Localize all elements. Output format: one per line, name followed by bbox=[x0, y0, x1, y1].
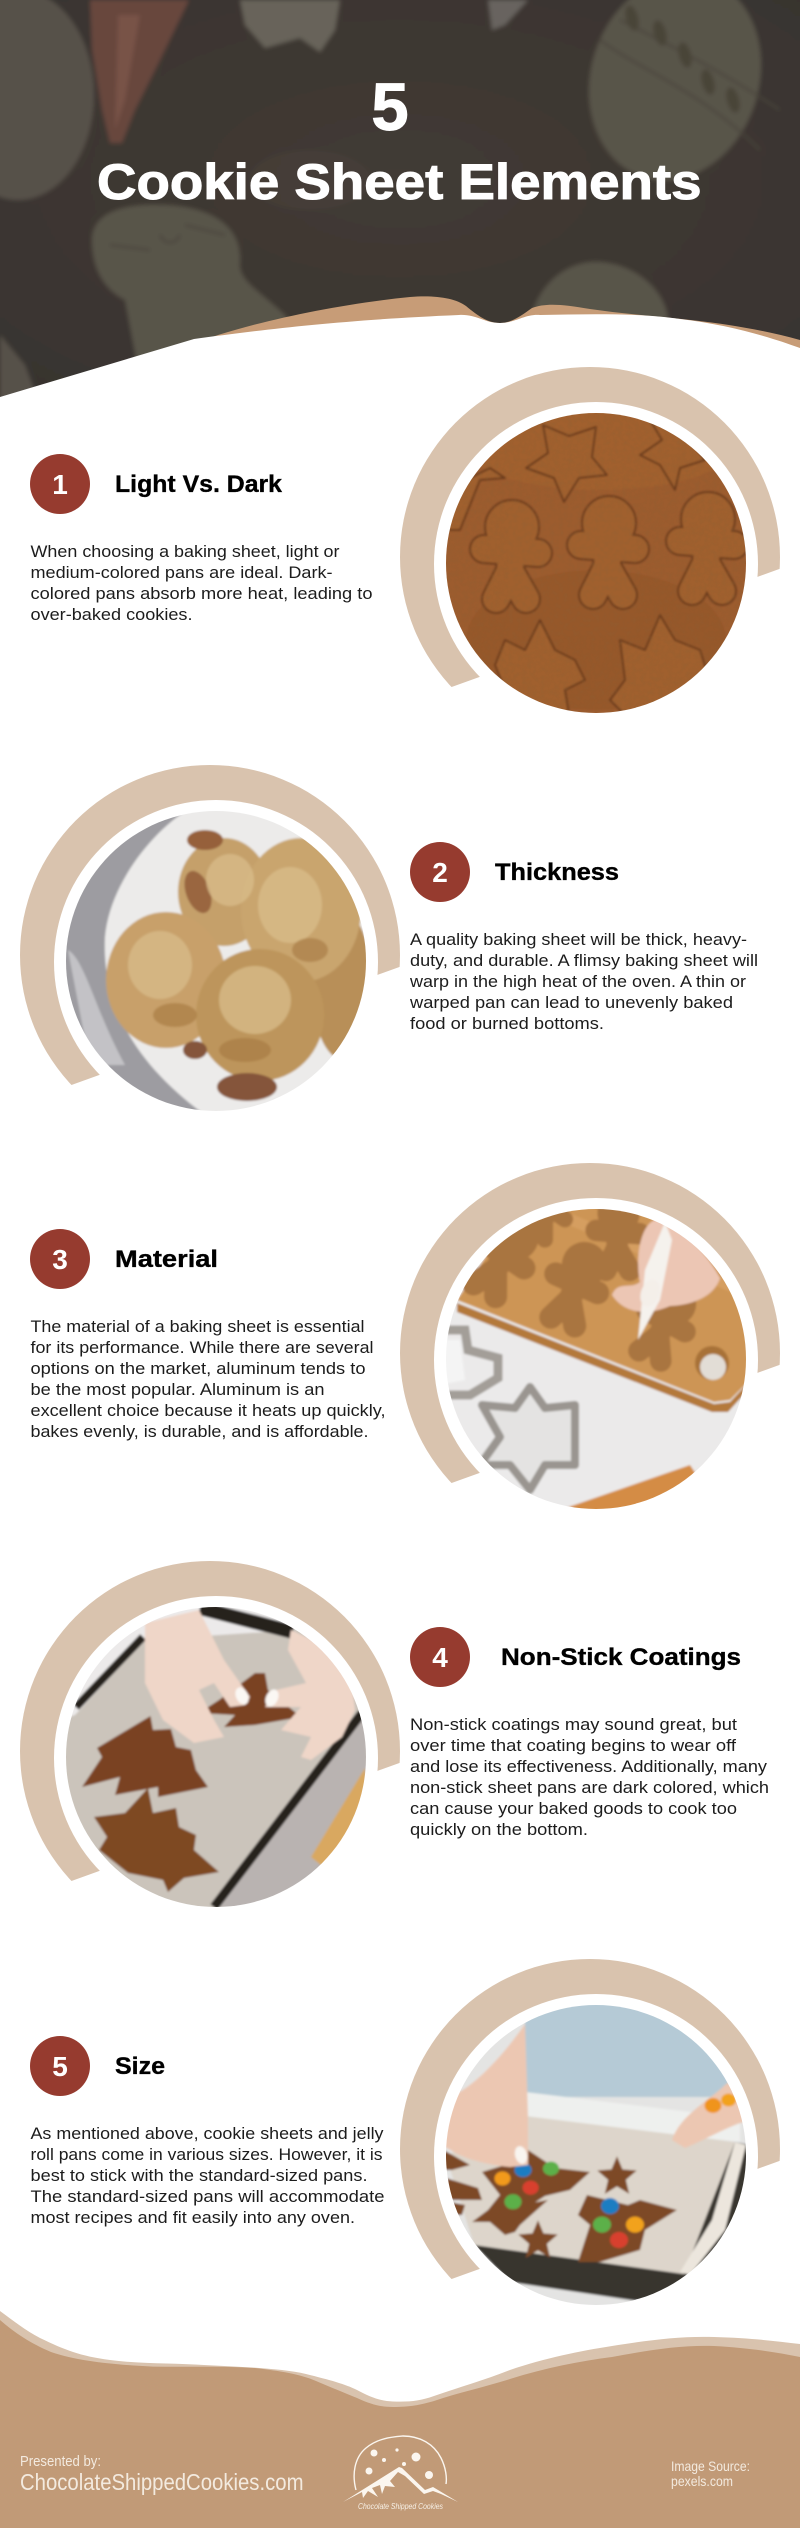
badge 4 bbox=[410, 1627, 470, 1687]
badge 1: 1 bbox=[52, 469, 68, 500]
image source: pexels.com bbox=[671, 2473, 733, 2489]
text 1: When choosing a baking sheet, light or bbox=[30, 542, 340, 561]
text 3 bbox=[30, 1317, 386, 1441]
logo bbox=[343, 2436, 458, 2511]
text 5: roll pans come in various sizes. However, it is bbox=[30, 2145, 382, 2164]
text 3: for its performance. While there are several bbox=[30, 1338, 374, 1357]
arch 1 bbox=[400, 367, 780, 747]
photo: rolled gingerbread dough bbox=[440, 405, 752, 720]
title: Cookie Sheet Elements bbox=[97, 154, 702, 210]
title: 5 bbox=[371, 70, 409, 145]
text 5: most recipes and fit easily into any oven. bbox=[30, 2208, 355, 2227]
text 4: non-stick sheet pans are dark colored, which bbox=[410, 1778, 769, 1797]
photo: hands and tree cookies on pan bbox=[60, 1600, 372, 1915]
image source: Image Source: bbox=[671, 2458, 750, 2474]
arch 3 bbox=[400, 1163, 780, 1543]
photo: icing gingerbread on board bbox=[446, 1209, 746, 1509]
text 2: duty, and durable. A flimsy baking sheet will bbox=[410, 951, 758, 970]
badge 5: 5 bbox=[52, 2051, 68, 2082]
text 4: over time that coating begins to wear off bbox=[410, 1736, 736, 1755]
arch 5 bbox=[400, 1959, 780, 2339]
text 4: can cause your baked goods to cook too bbox=[410, 1799, 737, 1818]
badge 2: 2 bbox=[432, 857, 448, 888]
text 4: quickly on the bottom. bbox=[410, 1820, 588, 1839]
badge 3: 3 bbox=[52, 1244, 68, 1275]
text 3: The material of a baking sheet is essential bbox=[30, 1317, 364, 1336]
heading 5: Size bbox=[115, 2053, 165, 2080]
text 5: best to stick with the standard-sized pans. bbox=[30, 2166, 368, 2185]
text 2: warped pan can lead to unevenly baked bbox=[409, 993, 733, 1012]
panel: 2 thickness bbox=[20, 765, 758, 1145]
header background photo bbox=[0, 0, 800, 410]
text 3: excellent choice because it heats up quickly, bbox=[30, 1401, 386, 1420]
text 2: warp in the high heat of the oven. A thin or bbox=[409, 972, 746, 991]
heading 3: Material bbox=[115, 1246, 218, 1273]
badge 1 bbox=[30, 454, 90, 514]
presented by bbox=[20, 2454, 304, 2495]
heading 1: Light Vs. Dark bbox=[115, 471, 283, 498]
header accent wave bbox=[214, 296, 800, 348]
text 3: be the most popular. Aluminum is an bbox=[30, 1380, 324, 1399]
photo: decorating cookies with candies bbox=[440, 2000, 752, 2312]
badge 3 bbox=[30, 1229, 90, 1289]
heading 4: Non-Stick Coatings bbox=[501, 1644, 741, 1671]
presented by: ChocolateShippedCookies.com bbox=[20, 2469, 304, 2495]
text 4 bbox=[410, 1715, 769, 1839]
arch 2 bbox=[20, 765, 400, 1145]
text 5: As mentioned above, cookie sheets and jelly bbox=[30, 2124, 384, 2143]
text 1: medium-colored pans are ideal. Dark- bbox=[30, 563, 332, 582]
presented by: Presented by: bbox=[20, 2454, 101, 2470]
arch 4 bbox=[20, 1561, 400, 1941]
text 1: colored pans absorb more heat, leading to bbox=[30, 584, 373, 603]
text 1 bbox=[30, 542, 373, 624]
panel: 4 non-stick coatings bbox=[20, 1561, 769, 1941]
heading 2: Thickness bbox=[495, 859, 619, 886]
text 2: A quality baking sheet will be thick, heavy- bbox=[410, 930, 747, 949]
text 3: options on the market, aluminum tends to bbox=[30, 1359, 366, 1378]
badge 2 bbox=[410, 842, 470, 902]
badge 4: 4 bbox=[432, 1642, 448, 1673]
text 4: and lose its effectiveness. Additionally, many bbox=[410, 1757, 768, 1776]
image source bbox=[671, 2458, 750, 2489]
panel: 3 material bbox=[30, 1163, 780, 1543]
footer wave main bbox=[0, 2320, 800, 2528]
panel: 5 size bbox=[30, 1959, 780, 2339]
logo: Chocolate Shipped Cookies bbox=[358, 2501, 444, 2511]
panel: 1 light vs dark bbox=[30, 367, 780, 747]
badge 5 bbox=[30, 2036, 90, 2096]
text 2: food or burned bottoms. bbox=[410, 1014, 604, 1033]
text 3: bakes evenly, is durable, and is affordable. bbox=[30, 1422, 368, 1441]
footer wave light band bbox=[0, 2311, 800, 2528]
text 5 bbox=[30, 2124, 384, 2227]
header white curve bbox=[0, 314, 800, 400]
text 1: over-baked cookies. bbox=[30, 605, 192, 624]
text 2 bbox=[409, 930, 758, 1033]
text 5: The standard-sized pans will accommodate bbox=[30, 2187, 384, 2206]
text 4: Non-stick coatings may sound great, but bbox=[410, 1715, 737, 1734]
title bbox=[97, 70, 702, 210]
photo: cookies on plate bbox=[60, 800, 372, 1117]
